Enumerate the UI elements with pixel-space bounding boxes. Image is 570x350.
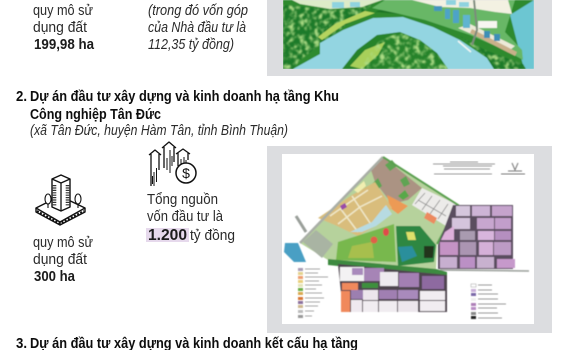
brown neighbourhood: [371, 157, 422, 204]
map legend left: [298, 268, 328, 318]
right water: [510, 0, 534, 69]
eco lake park: [396, 226, 436, 266]
text block: project 2 total investment: Tổng nguồn: [147, 192, 218, 208]
text block: project 2 total investment: tỷ đồng: [190, 228, 235, 244]
heading: project 2: Dự án đầu tư xây dựng và kinh doanh hạ tầng Khu: [30, 89, 339, 105]
blue lake: [284, 243, 306, 262]
text block: project 2 land area: quy mô sử: [33, 235, 93, 251]
icon: rising houses with dollar coin: $: [182, 165, 190, 181]
text block: project 1 investor capital: [148, 3, 248, 53]
text block: project 1 investor capital: của Nhà đầu tư là: [148, 20, 246, 36]
heading: project 2: Công nghiệp Tân Đức: [30, 107, 161, 123]
orange plots: [387, 195, 408, 214]
lower industrial zone: [338, 264, 447, 312]
heading: project 2: 2.: [16, 89, 27, 105]
text block: project 1 land area: 199,98 ha: [34, 37, 95, 53]
panel: Tân Đức master plan map: [267, 146, 552, 333]
island: [342, 32, 448, 69]
white residential grid: [412, 188, 458, 226]
green road band: [328, 259, 447, 277]
grey plots: [303, 230, 333, 258]
text block: project 1 land area: dụng đất: [33, 20, 87, 36]
roads: [300, 157, 383, 243]
text block: project 2 total investment: 1.200: [148, 227, 187, 244]
heading: project 2: [16, 89, 339, 123]
text block: project 2 land area: [33, 235, 93, 285]
purple industrial grid: [438, 205, 513, 269]
forest bank: [464, 38, 526, 69]
icon: rising houses with dollar coin: [149, 142, 196, 186]
text block: project 1 investor capital: (trong đó vốn góp: [148, 3, 248, 19]
canal: [350, 205, 392, 232]
panel: aerial render of project 1: [267, 0, 552, 76]
central park: [336, 224, 396, 262]
text block: project 2 total investment: vốn đầu tư là: [147, 209, 224, 225]
text block: project 1 land area: quy mô sử: [33, 3, 93, 19]
text block: project 2 land area: dụng đất: [33, 252, 87, 268]
text block: project 1 investor capital: 112,35 tỷ đồng): [148, 37, 234, 53]
icon: isometric building on plot: [36, 175, 85, 225]
river: [293, 17, 494, 69]
buildings: [434, 6, 442, 11]
text block: project 2 total investment: [146, 192, 235, 244]
map title: [433, 162, 525, 174]
residential base: [300, 166, 450, 270]
built-up bank: [372, 0, 523, 60]
highlight: 1.200: [146, 228, 189, 242]
text block: project 2 land area: 300 ha: [34, 269, 76, 285]
tan housing: [318, 182, 392, 236]
text block: project 1 land area: [33, 3, 95, 53]
text block: project 2 location: (xã Tân Đức, huyện Hàm Tân, tỉnh Bình Thuận): [30, 123, 288, 139]
map legend right: [471, 284, 506, 319]
